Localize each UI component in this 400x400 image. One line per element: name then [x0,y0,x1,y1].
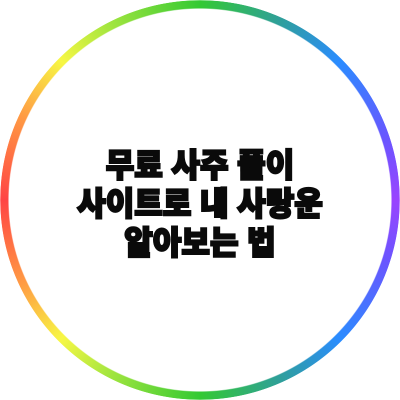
title: 사이트로 내 사랑운 [77,186,323,222]
title [76,147,323,261]
title: 알아보는 법 [124,224,276,261]
title: 무료 사주 풀이 [106,147,294,184]
